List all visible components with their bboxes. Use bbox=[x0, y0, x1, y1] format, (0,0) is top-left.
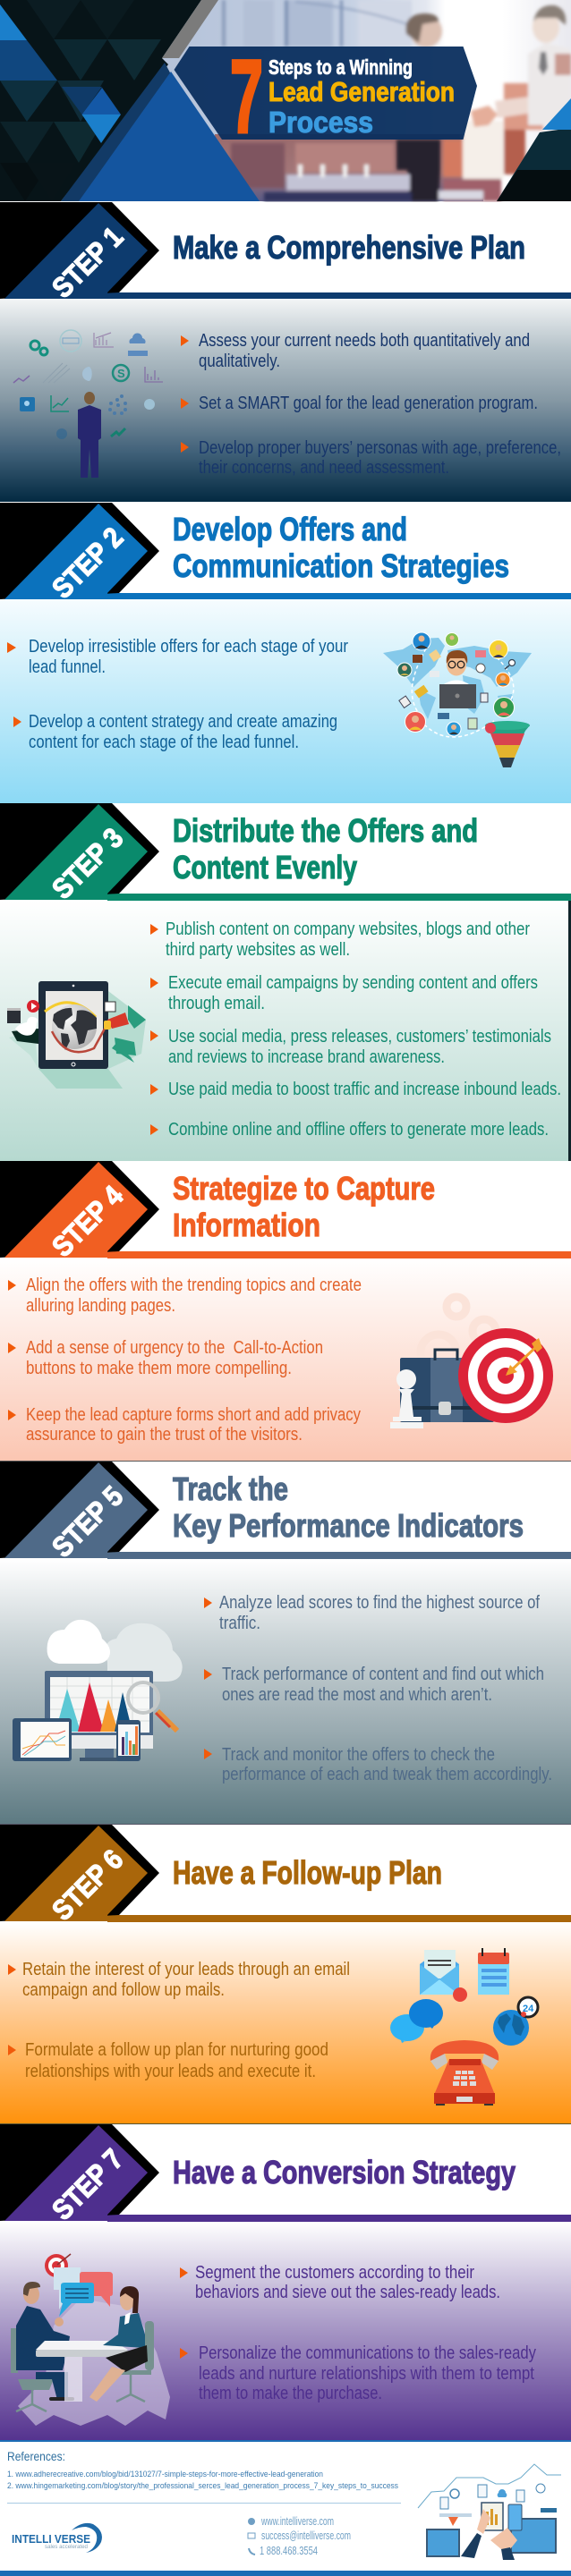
step 6 heading: Have a Follow-up Plan bbox=[173, 1854, 442, 1891]
step 7 bullet list: them to make the purchase. bbox=[199, 2384, 382, 2403]
reference links: 2. www.hingemarketing.com/blog/story/the_professional_serces_lead_generation_process_7_key_steps_to_success bbox=[7, 2481, 398, 2491]
step 6 bullet list bbox=[8, 1960, 350, 2081]
envelope bbox=[420, 1950, 467, 2002]
illustration: briefcase, target and pawn bbox=[390, 1297, 553, 1428]
contact details: success@intelliverse.com bbox=[261, 2529, 351, 2542]
globe bbox=[52, 1004, 105, 1052]
step 4 bullet list: alluring landing pages. bbox=[26, 1296, 175, 1316]
marketer figure bbox=[439, 650, 476, 708]
illustration: business meeting bbox=[11, 2254, 170, 2426]
step 2 bullet list: Develop irresistible offers for each stage of your bbox=[29, 637, 348, 657]
step 4 bullet list: assurance to gain the trust of the visitors. bbox=[26, 1425, 303, 1445]
step 4 badge label: STEP 4 bbox=[46, 1179, 130, 1263]
step 1 bullet list bbox=[181, 331, 561, 478]
step 4 bullet list: Align the offers with the trending topics and create bbox=[26, 1275, 362, 1295]
step 6 bullet list: Retain the interest of your leads through an email bbox=[22, 1960, 350, 1979]
illustration: person with analytics icons bbox=[13, 330, 163, 478]
monitor with triangle chart bbox=[45, 1671, 153, 1761]
chess pawn bbox=[390, 1369, 423, 1428]
small office items bbox=[399, 649, 516, 729]
panel: step 1 bbox=[0, 299, 571, 502]
background photo: handshake and skyline bbox=[0, 0, 571, 201]
step 4 bullet list bbox=[8, 1275, 362, 1445]
step 3 bullet list: and reviews to increase brand awareness. bbox=[168, 1047, 445, 1067]
intelliverse logo: sales accelerated bbox=[45, 2545, 88, 2550]
magnifying glass bbox=[128, 1682, 177, 1731]
step 1 bullet list: qualitatively. bbox=[199, 352, 280, 371]
step 1 bullet list: their concerns, and need assessment. bbox=[199, 458, 449, 478]
step 6 bullet list: campaign and follow up mails. bbox=[22, 1980, 225, 2000]
speech bubbles bbox=[54, 2267, 113, 2317]
pale shadow shape bbox=[18, 2299, 170, 2426]
step 3 header bbox=[0, 803, 571, 905]
step 2 bullet list bbox=[7, 637, 348, 752]
illustration: digital marketing devices bbox=[418, 2464, 561, 2560]
title: large 7: 7 bbox=[230, 38, 263, 155]
hero banner bbox=[0, 0, 571, 201]
references heading: References: bbox=[7, 2449, 65, 2463]
globe with 24 hour clock bbox=[493, 1997, 538, 2046]
step 2 bullet list: lead funnel. bbox=[29, 657, 106, 677]
teal accent shapes bbox=[112, 1005, 146, 1063]
step 7 header bbox=[0, 2123, 571, 2226]
step 5 bullet list bbox=[204, 1593, 552, 1784]
step 5 bullet list: Track and monitor the offers to check the bbox=[222, 1745, 495, 1765]
step 2 heading: Communication Strategies bbox=[173, 547, 509, 584]
illustration: communication channels bbox=[390, 1948, 538, 2106]
phone with bars bbox=[116, 1720, 141, 1761]
pale gears bbox=[421, 1297, 496, 1370]
tablet device bbox=[38, 981, 108, 1069]
illustration: tablet with globe and social media bbox=[7, 981, 146, 1089]
panel: step 3 bbox=[0, 901, 571, 1161]
contact details bbox=[248, 2514, 351, 2557]
reference links bbox=[7, 2470, 398, 2491]
step 3 heading bbox=[173, 812, 478, 886]
tablet with line chart bbox=[13, 1718, 72, 1761]
sales funnel bbox=[485, 721, 530, 767]
dark triangular mosaic bbox=[0, 0, 201, 201]
step 3 heading: Content Evenly bbox=[173, 849, 357, 886]
intelliverse logo bbox=[12, 2523, 102, 2553]
footer bbox=[0, 2440, 571, 2576]
gray diagonal stripe bbox=[162, 0, 218, 58]
step 7 bullet list bbox=[180, 2263, 536, 2403]
panel: step 2 bbox=[0, 599, 571, 803]
step 3 heading: Distribute the Offers and bbox=[173, 812, 478, 849]
man seated bbox=[11, 2282, 74, 2411]
step 7 bullet list: Segment the customers according to their bbox=[195, 2263, 474, 2283]
megaphone bbox=[104, 1013, 129, 1030]
briefcase bbox=[400, 1350, 494, 1422]
step 2 header bbox=[0, 503, 571, 605]
avatars bbox=[397, 632, 514, 736]
contact details: www.intelliverse.com bbox=[260, 2514, 334, 2528]
step 3 bullet list: through email. bbox=[168, 994, 265, 1013]
step 7 bullet list: behaviors and sieve out the sales-ready leads. bbox=[195, 2283, 500, 2302]
step 3 bullet list: third party websites as well. bbox=[166, 940, 350, 960]
step 4 header bbox=[0, 1161, 571, 1263]
step 5 heading bbox=[173, 1470, 524, 1544]
large blue triangle bbox=[79, 72, 260, 201]
title: steps to a winning: Steps to a Winning bbox=[268, 55, 413, 79]
step 6 bullet list: relationships with your leads and execute it. bbox=[25, 2062, 316, 2081]
panel: step 5 bbox=[0, 1559, 571, 1824]
globe with 24 hour clock: 24 bbox=[523, 2004, 534, 2014]
illustration: cloud analytics on devices bbox=[13, 1620, 183, 1761]
intelliverse logo: INTELLI VERSE bbox=[12, 2532, 90, 2546]
table bbox=[36, 2341, 128, 2402]
target bbox=[458, 1328, 553, 1423]
step 2 heading bbox=[173, 511, 509, 584]
step 4 bullet list: Keep the lead capture forms short and add privacy bbox=[26, 1405, 361, 1425]
illustration: world map, marketer and funnel bbox=[383, 632, 532, 767]
step 2 badge label: STEP 2 bbox=[46, 521, 129, 605]
reference links: 1. www.adherecreative.com/blog/bid/131027/7-simple-steps-for-more-effective-lead-generation bbox=[7, 2470, 323, 2479]
step 5 heading: Track the bbox=[173, 1470, 288, 1507]
step 4 bullet list: buttons to make them more compelling. bbox=[26, 1359, 292, 1378]
title ribbon bbox=[174, 47, 477, 140]
right corner triangles bbox=[497, 98, 571, 201]
twitter bird and play button bbox=[7, 1000, 39, 1044]
title: process: Process bbox=[268, 106, 373, 139]
chat bubbles bbox=[390, 1999, 443, 2043]
title: lead generation: Lead Generation bbox=[268, 76, 455, 107]
step 6 bullet list: Formulate a follow up plan for nurturing good bbox=[25, 2040, 328, 2060]
step 3 bullet list bbox=[150, 919, 561, 1140]
step 5 header bbox=[0, 1461, 571, 1563]
step 6 header bbox=[0, 1824, 571, 1927]
step 2 bullet list: content for each stage of the lead funnel. bbox=[29, 733, 299, 752]
step 4 heading: Strategize to Capture bbox=[173, 1170, 435, 1207]
man silhouette bbox=[78, 392, 101, 478]
step 6 badge label: STEP 6 bbox=[46, 1843, 129, 1927]
panel: step 7 bbox=[0, 2222, 571, 2440]
step 3 badge label: STEP 3 bbox=[46, 822, 129, 905]
step 7 badge label: STEP 7 bbox=[46, 2143, 129, 2226]
panel: step 4 bbox=[0, 1258, 571, 1461]
step 1 badge label: STEP 1 bbox=[46, 221, 129, 304]
calendar bbox=[478, 1948, 509, 1995]
red telephone bbox=[430, 2040, 499, 2106]
step 4 heading bbox=[173, 1170, 435, 1243]
target with dart bbox=[45, 2254, 71, 2277]
clouds bbox=[47, 1620, 183, 1682]
step 4 bullet list: Add a sense of urgency to the Call-to-Action bbox=[26, 1338, 323, 1358]
step 1 header bbox=[0, 202, 571, 304]
contact details: 1 888.468.3554 bbox=[260, 2544, 318, 2557]
step 5 bullet list: traffic. bbox=[219, 1614, 260, 1633]
step 2 heading: Develop Offers and bbox=[173, 511, 407, 547]
step 5 badge label: STEP 5 bbox=[46, 1480, 129, 1563]
step 2 bullet list: Develop a content strategy and create amazing bbox=[29, 712, 337, 732]
panel: step 6 bbox=[0, 1922, 571, 2123]
navy diagonal stripe bbox=[61, 63, 172, 201]
step 5 bullet list: ones are read the most and which aren’t. bbox=[222, 1685, 492, 1705]
woman seated bbox=[89, 2286, 154, 2402]
illustration: person with analytics icons: S bbox=[117, 367, 125, 380]
step 4 heading: Information bbox=[173, 1207, 320, 1243]
